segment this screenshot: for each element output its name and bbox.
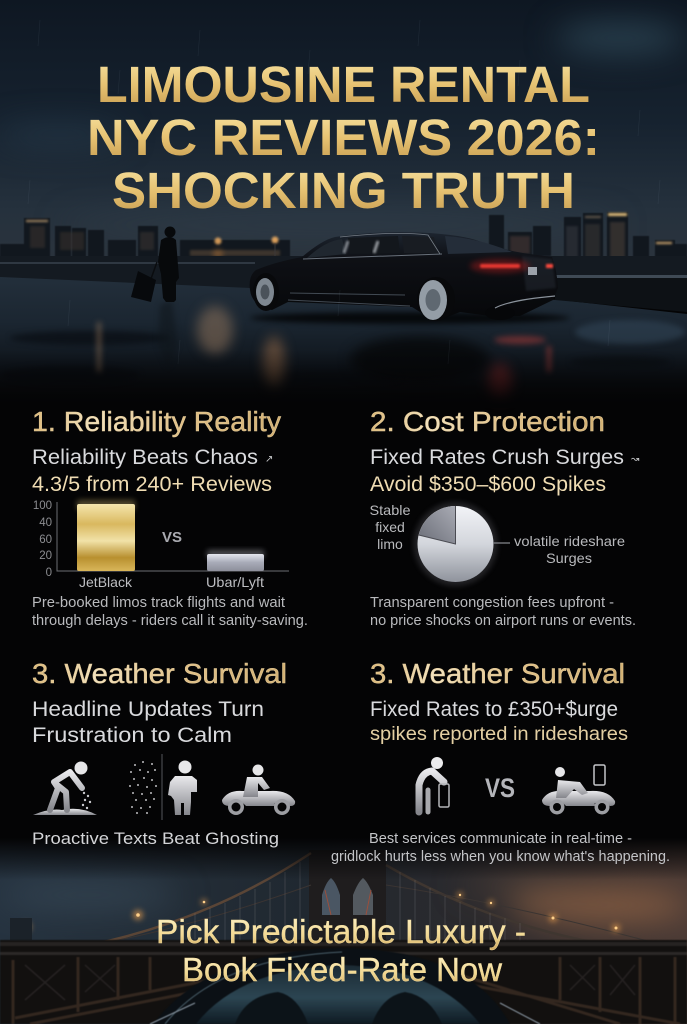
icon: rider in vehicle with phone: [542, 765, 615, 814]
description: Transparent congestion fees upfront -: [370, 595, 614, 611]
versus label: VS: [162, 529, 182, 546]
title: NYC REVIEWS 2026:: [87, 109, 600, 166]
bar label: JetBlack: JetBlack: [79, 574, 133, 590]
y axis labels: 100: [33, 500, 52, 512]
pie label: volatile rideshare surges: volatile rideshare: [514, 533, 625, 549]
icon: small arrow glyph: ↗: [265, 454, 273, 465]
heading: 3. Weather Survival: [370, 658, 625, 689]
pie label: volatile rideshare surges: [514, 533, 625, 566]
savings line: Avoid $350–$600 Spikes: [370, 473, 606, 496]
panel: cost protection: [370, 406, 640, 629]
heading: 1. Reliability Reality: [32, 406, 281, 437]
road: [0, 277, 687, 405]
subheading: Frustration to Calm: [32, 724, 232, 747]
railing and deck: [0, 940, 687, 1024]
icon: person in the rain on the ground: [33, 762, 97, 815]
suspension cables: [60, 853, 680, 950]
pie label: volatile rideshare surges: Surges: [546, 550, 592, 566]
title: LIMOUSINE RENTAL: [97, 56, 590, 113]
pie label: stable fixed limo: Stable: [370, 502, 411, 518]
y axis labels: 40: [39, 517, 52, 529]
front wheel: [253, 273, 279, 311]
rating: 4.3/5 from 240+ Reviews: [32, 473, 272, 496]
icon: rain dots: [129, 761, 157, 814]
rain streaks: [28, 20, 660, 364]
subheading: Fixed Rates to £350+$urge: [370, 698, 618, 721]
barrier: [0, 262, 687, 312]
bridge lamps: [10, 892, 620, 940]
description: through delays - riders call it sanity-saving.: [32, 613, 308, 629]
description: Best services communicate in real-time -: [369, 831, 632, 847]
heading: 3. Weather Survival: [32, 658, 287, 689]
icon: rider in vehicle: [222, 764, 295, 815]
bar: Uber/Lyft: [207, 554, 264, 571]
hero scene: limousine in the rain: [0, 0, 687, 408]
title: [87, 56, 600, 219]
rear wheel: [417, 277, 455, 321]
car interior windshield view: [150, 948, 540, 1024]
description: [331, 831, 670, 865]
gold detail line: spikes reported in rideshares: [370, 724, 628, 745]
y axis labels: 20: [39, 550, 52, 562]
description: Pre-booked limos track flights and wait: [32, 595, 285, 611]
y axis labels: 0: [46, 567, 52, 579]
car windows: [303, 233, 556, 291]
icon: standing person: [168, 760, 197, 815]
bar chart: [33, 500, 289, 590]
pie chart: [414, 502, 510, 586]
y axis labels: [33, 500, 52, 579]
panel: weather survival, rates: [331, 658, 670, 865]
heading: 2. Cost Protection: [370, 406, 605, 437]
pie label: stable fixed limo: limo: [377, 536, 403, 552]
bar: JetBlack: [77, 504, 135, 571]
traveller with suitcase: [131, 226, 179, 302]
icon: stooped person with suitcase: [419, 757, 449, 812]
call to action: [156, 913, 526, 988]
call to action: Book Fixed-Rate Now: [182, 951, 502, 988]
bottom scene: bridge at dusk: [0, 838, 687, 1024]
call to action: Pick Predictable Luxury -: [156, 913, 526, 950]
subheading: Headline Updates Turn: [32, 698, 264, 721]
bridge tower: [309, 850, 386, 950]
versus label: VS: [485, 773, 515, 803]
description: [370, 595, 636, 629]
wet road reflections: [0, 300, 685, 400]
description: no price shocks on airport runs or events.: [370, 613, 636, 629]
bar label: Ubar/Lyft: Ubar/Lyft: [206, 574, 264, 590]
pie label: stable fixed limo: [370, 502, 411, 552]
skyline: [0, 212, 687, 273]
icon: small arrow glyph: ↝: [631, 454, 640, 465]
title: SHOCKING TRUTH: [112, 162, 575, 219]
description: gridlock hurts less when you know what's happening.: [331, 849, 670, 865]
y axis labels: 60: [39, 534, 52, 546]
pie label: stable fixed limo: fixed: [375, 519, 405, 535]
limousine: [250, 232, 570, 324]
tail lights: [470, 259, 553, 275]
caption: Proactive Texts Beat Ghosting: [32, 829, 279, 848]
far roadside band: [0, 256, 687, 288]
description: [32, 595, 308, 629]
panel: reliability reality: [32, 406, 308, 629]
street lamps: [98, 236, 278, 273]
subheading: [32, 698, 264, 747]
subheading: Fixed Rates Crush Surges: [370, 446, 624, 469]
panel: weather survival, updates: [32, 658, 295, 848]
subheading: Reliability Beats Chaos: [32, 446, 258, 469]
